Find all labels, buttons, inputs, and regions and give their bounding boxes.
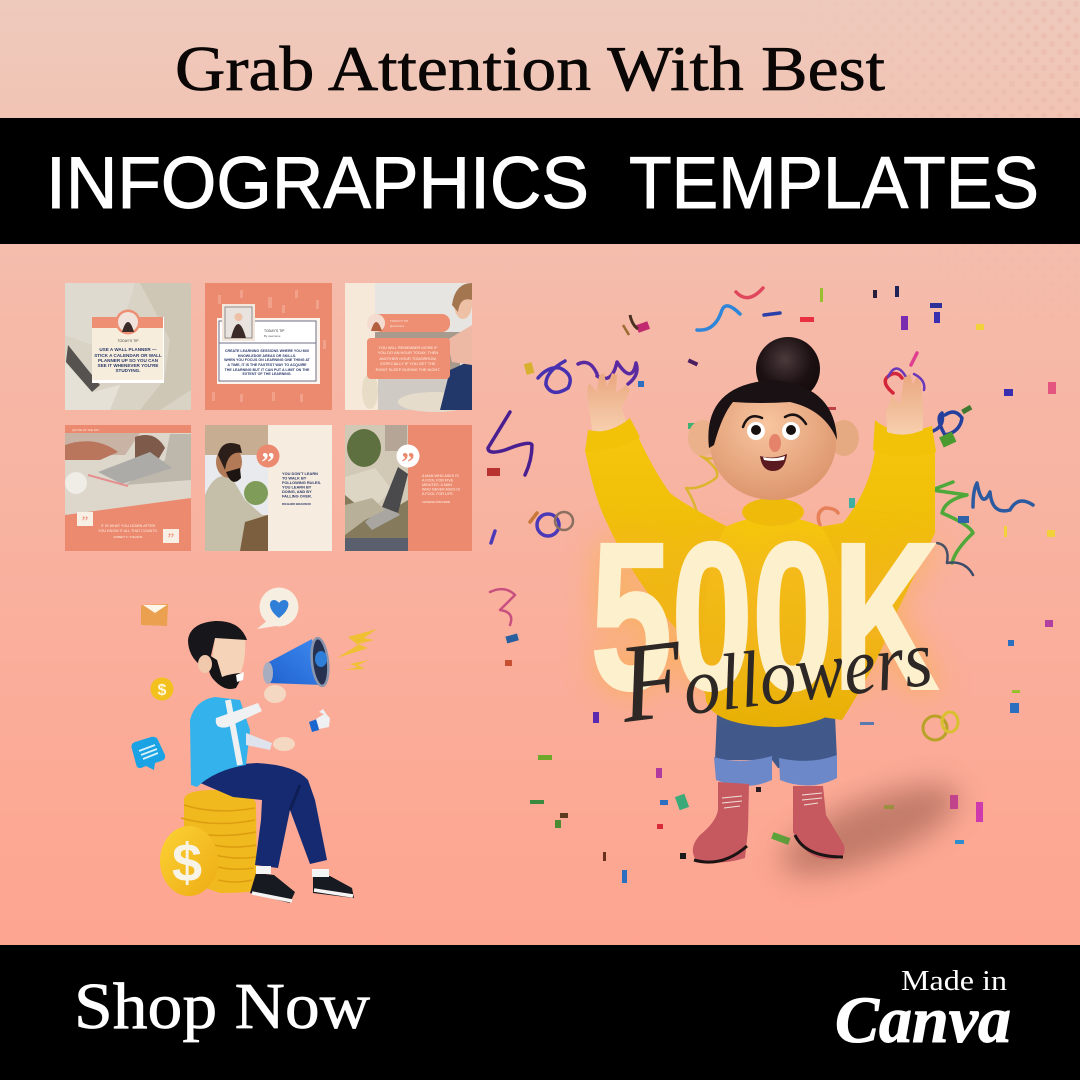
legs and shorts [714,715,837,786]
confetti pieces [487,286,1056,883]
thumbnail 5: walking rules quote: ” [261,447,275,477]
thumbnail 5: walking rules quote: DOING, AND BY [282,489,312,494]
thumbnail 2: learning sessions tip: TODAY'S TIP [264,329,285,333]
coin stack [160,790,257,896]
thumbnail 6: asking quote: CHINESE PROVERB [422,500,450,504]
ground shadow [771,767,969,893]
thumbnail 4: laptop quote: ” [82,514,88,530]
thumbnail 4: laptop quote: QUOTE OF THE DAY [72,428,99,432]
thumbnail 6: asking quote: A FOOL FOR LIFE. [422,492,454,496]
thumbnail 2: learning sessions tip: A TIME, IT IS THE FASTEST WAY TO ACQUIRE [227,363,307,367]
thumbnail 3: remember more tip: YOU DO AN HOUR TODAY, THEN [378,350,438,355]
thumbnail 4: laptop quote: YOU KNOW IT ALL THAT COUNTS. [98,529,158,533]
thumbnail 6: asking quote: ” [401,447,415,477]
head and hair [708,380,837,500]
thumbnail 4: laptop quote: IT IS WHAT YOU LEARN AFTER [101,524,156,528]
hands [587,373,923,435]
thumbnail 6: asking quote: WHO NEVER ASKS IS [422,488,460,492]
man's head [188,621,247,689]
thumbnail 2: learning sessions tip [205,283,332,410]
confetti ribbons [488,288,1033,740]
thumbnail 3: remember more tip: @username [390,324,405,328]
thumbnail 5: walking rules quote: FOLLOWING RULES. [282,480,321,485]
thumbnail 4: laptop quote [65,425,191,551]
thumbnail 5: walking rules quote: RICHARD BRANSON [282,502,311,506]
thumbnail 2: learning sessions tip: CREATE LEARNING SESSIONS WHERE YOU MIX [225,349,310,353]
thumbnail 1: wall planner tip: PLANNER UP SO YOU CAN [98,358,159,363]
badge: Made in Canva: Made in [901,966,1007,997]
thumbnail 1: wall planner tip: TODAY'S TIP [117,339,139,343]
thumbnail 5: walking rules quote: FALLING OVER. [282,494,312,498]
bun and ears [688,337,859,456]
megaphone [263,637,330,687]
badge: Made in Canva: Canva [835,984,1011,1057]
heading: Grab Attention With Best: Grab Attention With Best [175,34,886,104]
thumbnail 1: wall planner tip: SEE IT WHENEVER YOU'RE [98,363,158,368]
thumbnail 4: laptop quote: ” [168,531,174,547]
face [743,415,806,471]
thumbnail 3: remember more tip: TODAY'S TIP [390,319,408,323]
boots [693,782,845,863]
template thumbnails grid [65,283,472,551]
icon: chat bubble [131,737,165,770]
icon: heart speech bubble [257,588,298,629]
thumbnail 3: remember more tip: RIGHT SLEEP DURING THE NIGHT. [376,367,440,372]
icon: dollar coin small [150,678,174,700]
title banner [0,118,1080,244]
title banner: INFOGRAPHICS [46,143,589,224]
sweater sleeves and body [585,418,936,727]
call to action: Shop Now: Shop Now [74,970,370,1043]
illustration: man with megaphone on coins [131,588,377,903]
thumbnail 3: remember more tip: ANOTHER HOUR TOMORROW, [379,356,437,361]
icon: lightning bolts [337,629,377,670]
thumbnail 4: laptop quote: ROBERT S. STEVENS [114,535,143,539]
script: Followers: Followers [612,586,938,747]
500K headline: 500K [591,501,938,733]
thumbnail 6: asking quote: A MAN WHO ASKS IS [422,474,459,478]
thumbnail 5: walking rules quote [205,425,332,551]
500K headline: 500K [591,501,938,733]
bottom banner [0,945,1080,1080]
thumbnail 2: learning sessions tip: EXTENT OF THE LEARNING. [242,372,292,376]
thumbnail 2: learning sessions tip: KNOWLEDGE AREAS OR SKILLS. [238,354,296,358]
thumbnail 1: wall planner tip [65,283,191,410]
coin stack: $ [172,833,202,893]
thumbnail 5: walking rules quote: TO WALK BY [282,476,307,480]
thumbnail 6: asking quote: MINUTES. A MAN [422,483,452,487]
thumbnail 6: asking quote [345,425,472,551]
icon: dollar coin small: $ [158,682,167,699]
thumbnail 1: wall planner tip: STICK A CALENDAR OR WALL [94,353,162,358]
thumbnail 1: wall planner tip: USE A WALL PLANNER — [99,347,157,352]
thumbnail 5: walking rules quote: YOU LEARN BY [282,484,312,490]
thumbnail 2: learning sessions tip: By username [264,334,281,338]
thumbnail 1: wall planner tip: STUDYING. [115,368,141,373]
icon: thumbs up [309,709,330,732]
thumbnail 6: asking quote: A FOOL FOR FIVE [422,478,454,482]
thumbnail 3: remember more tip: ESPECIALLY IF YOU GET THE [380,361,436,366]
icon: envelope [141,604,168,626]
thumbnail 5: walking rules quote: YOU DON'T LEARN [282,471,318,476]
thumbnail 3: remember more tip [345,283,472,412]
illustration: celebrating girl [585,337,969,893]
thumbnail 2: learning sessions tip: WHEN YOU FOCUS ON LEARNING ONE THING AT [224,358,311,362]
title banner: TEMPLATES [629,143,1039,224]
man's legs and shoes [198,763,354,903]
man's torso and shirt [190,685,295,787]
thumbnail 3: remember more tip: YOU WILL REMEMBER MORE IF [378,345,438,350]
thumbnail 2: learning sessions tip: THE LEARNING BUT IT CAN PUT A LIMIT ON THE [225,368,310,372]
